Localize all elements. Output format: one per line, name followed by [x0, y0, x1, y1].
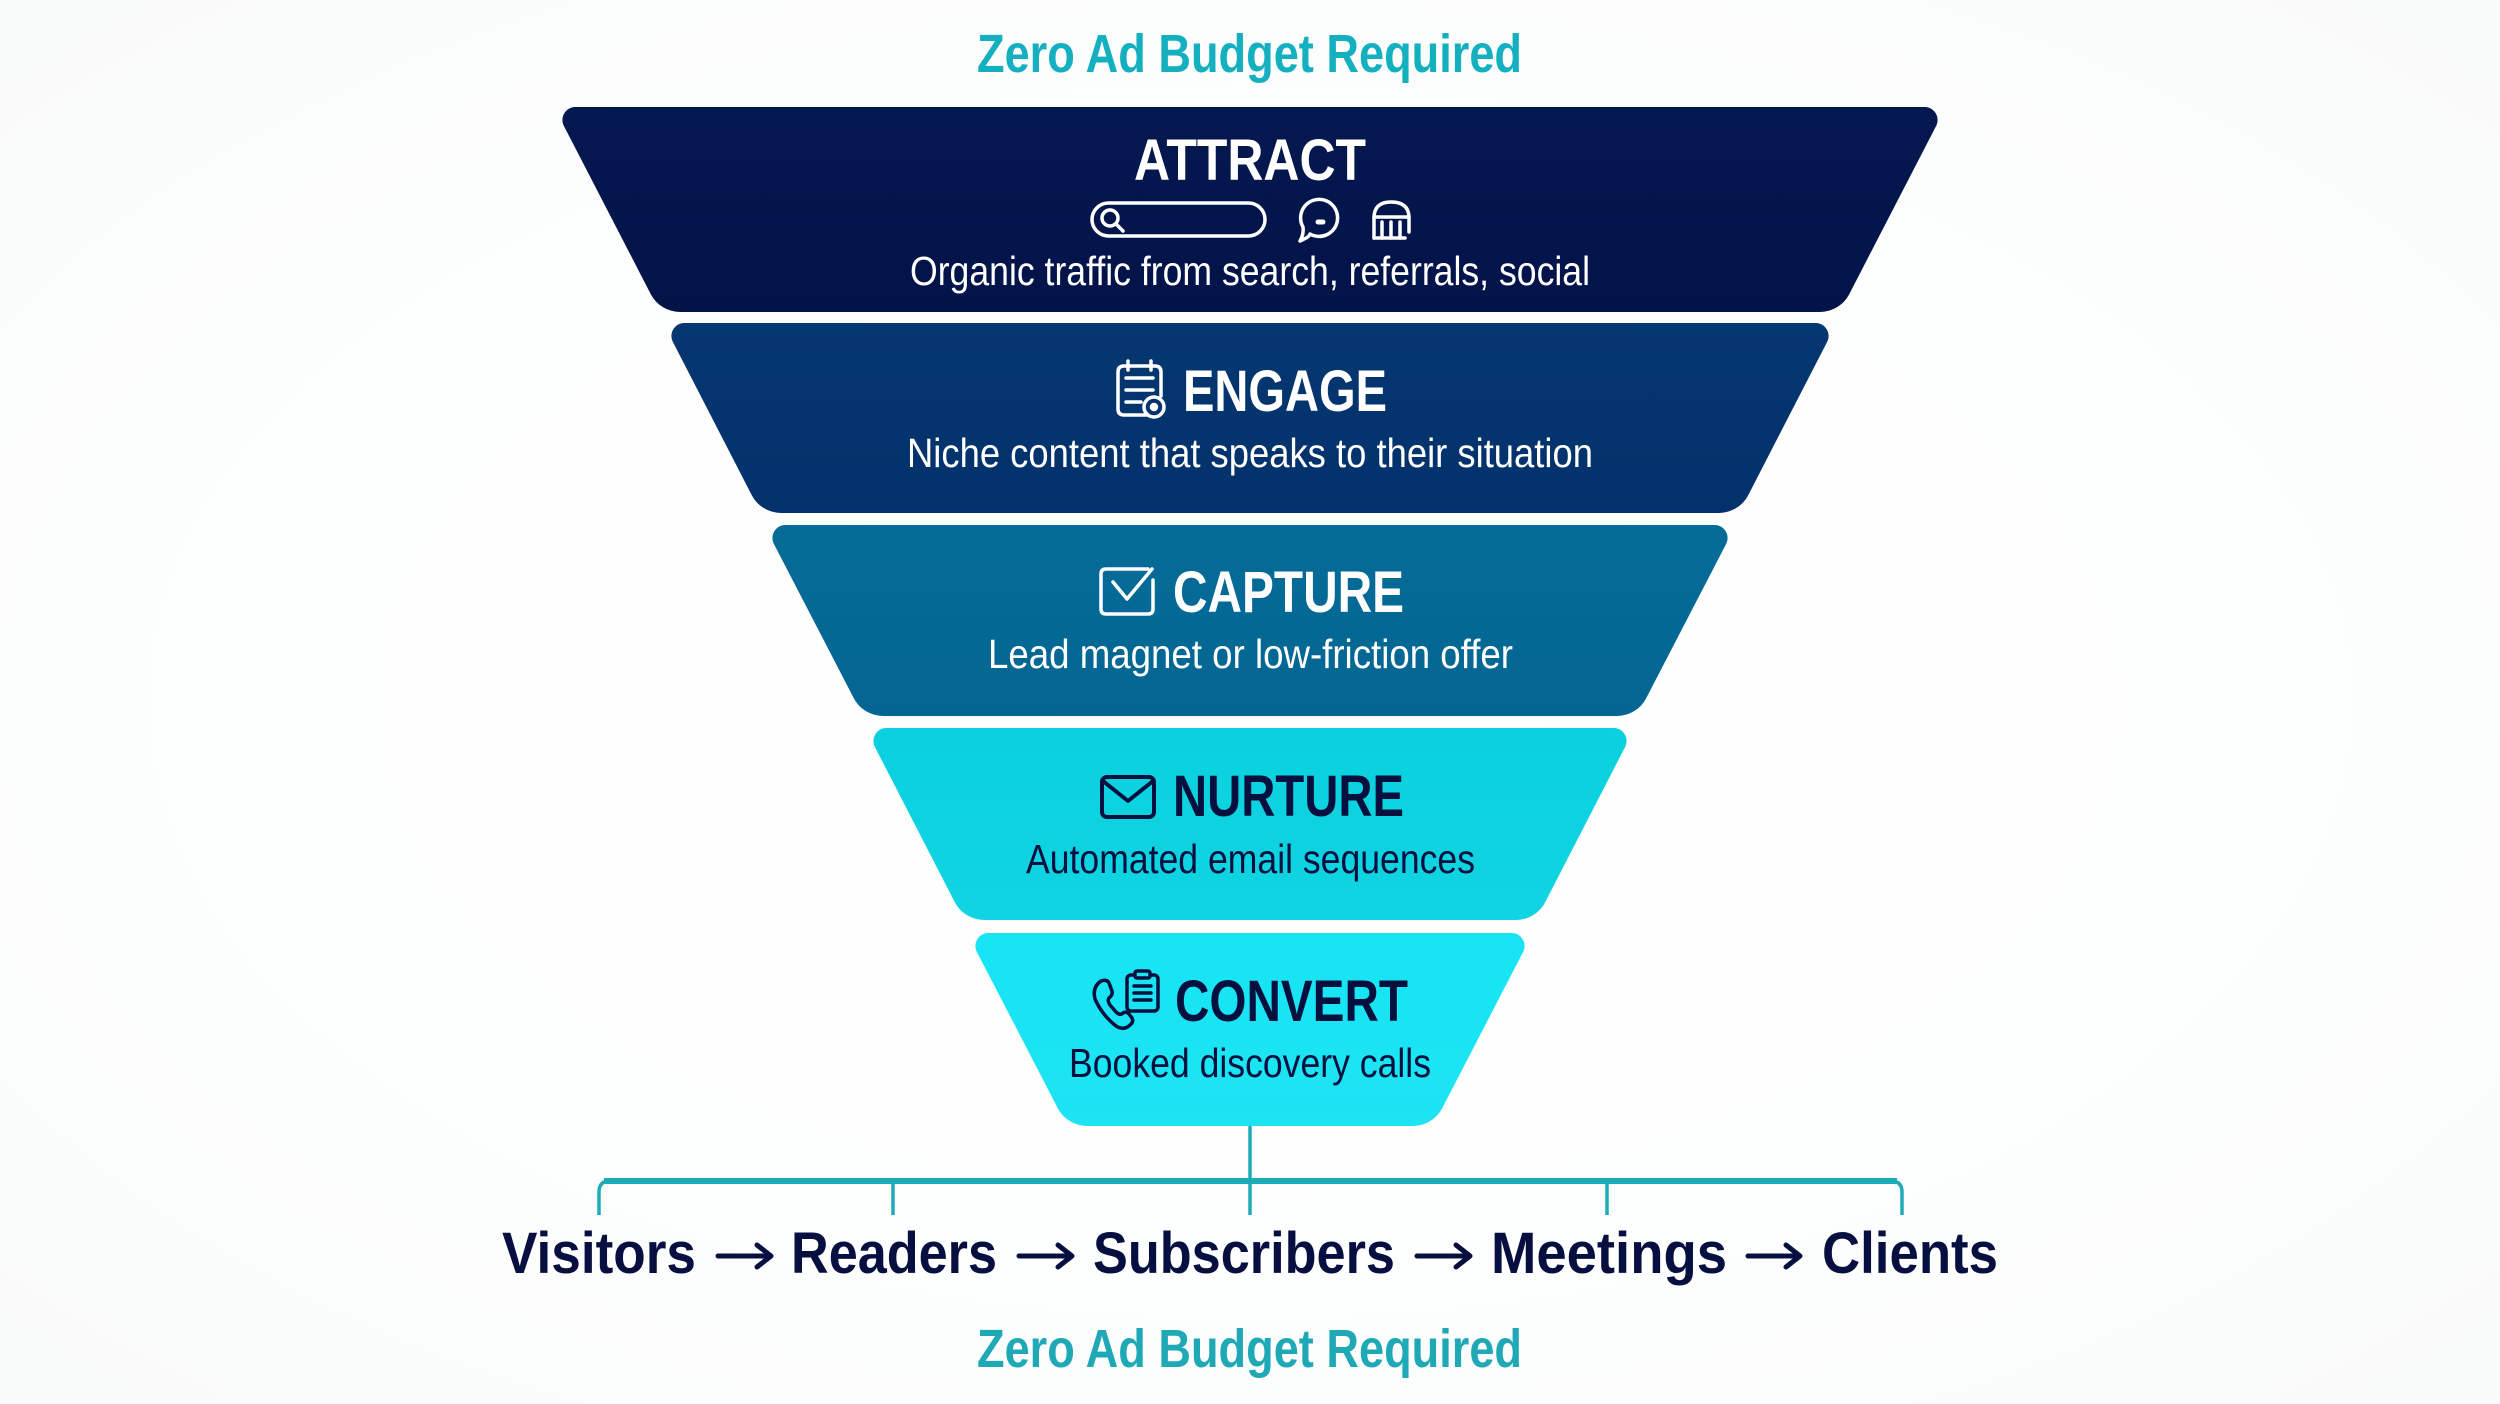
label: Clients: Clients — [1822, 1221, 1998, 1286]
label: Readers: Readers — [791, 1221, 997, 1286]
attract heading: ATTRACT — [1134, 128, 1366, 193]
capture trapezoid — [772, 525, 1728, 716]
capture description: Lead magnet or low-friction offer — [988, 631, 1513, 677]
arrow — [718, 1245, 771, 1267]
bottom heading: Zero Ad Budget Required: Zero Ad Budget Required — [977, 1319, 1522, 1379]
label: Subscribers: Subscribers — [1093, 1221, 1395, 1286]
arrow — [1748, 1245, 1800, 1267]
engage heading: ENGAGE — [1183, 359, 1387, 424]
icon: checkbox form — [1101, 569, 1153, 614]
icon: email envelope — [1102, 777, 1154, 817]
convert heading: CONVERT — [1175, 969, 1408, 1034]
panel: engage tier — [671, 323, 1829, 513]
capture heading: CAPTURE — [1173, 560, 1404, 625]
icon: storefront — [1374, 202, 1409, 238]
nurture description: Automated email sequences — [1026, 836, 1475, 882]
icon: chat bubble — [1300, 199, 1338, 241]
panel: nurture tier — [873, 728, 1627, 920]
convert trapezoid — [975, 933, 1525, 1126]
icon: phone and clipboard — [1094, 971, 1158, 1028]
engage trapezoid — [671, 323, 1829, 513]
icon: search bar — [1092, 203, 1265, 236]
arrow — [1417, 1245, 1470, 1267]
label: Visitors: Visitors — [502, 1221, 696, 1286]
attract trapezoid — [562, 107, 1938, 312]
nurture heading: NURTURE — [1173, 764, 1404, 829]
panel: attract tier — [562, 107, 1938, 312]
label: Meetings: Meetings — [1491, 1221, 1727, 1286]
panel: capture tier — [772, 525, 1728, 716]
convert description: Booked discovery calls — [1069, 1040, 1431, 1086]
top heading: Zero Ad Budget Required: Zero Ad Budget Required — [977, 24, 1522, 84]
stage flow row — [502, 1221, 1998, 1286]
attract description: Organic traffic from search, referrals, social — [910, 248, 1590, 294]
connector bracket — [599, 1126, 1902, 1215]
icon: content calendar — [1118, 361, 1164, 417]
nurture trapezoid — [873, 728, 1627, 920]
arrow — [1019, 1245, 1072, 1267]
panel: convert tier — [975, 933, 1525, 1126]
engage description: Niche content that speaks to their situation — [907, 430, 1593, 476]
